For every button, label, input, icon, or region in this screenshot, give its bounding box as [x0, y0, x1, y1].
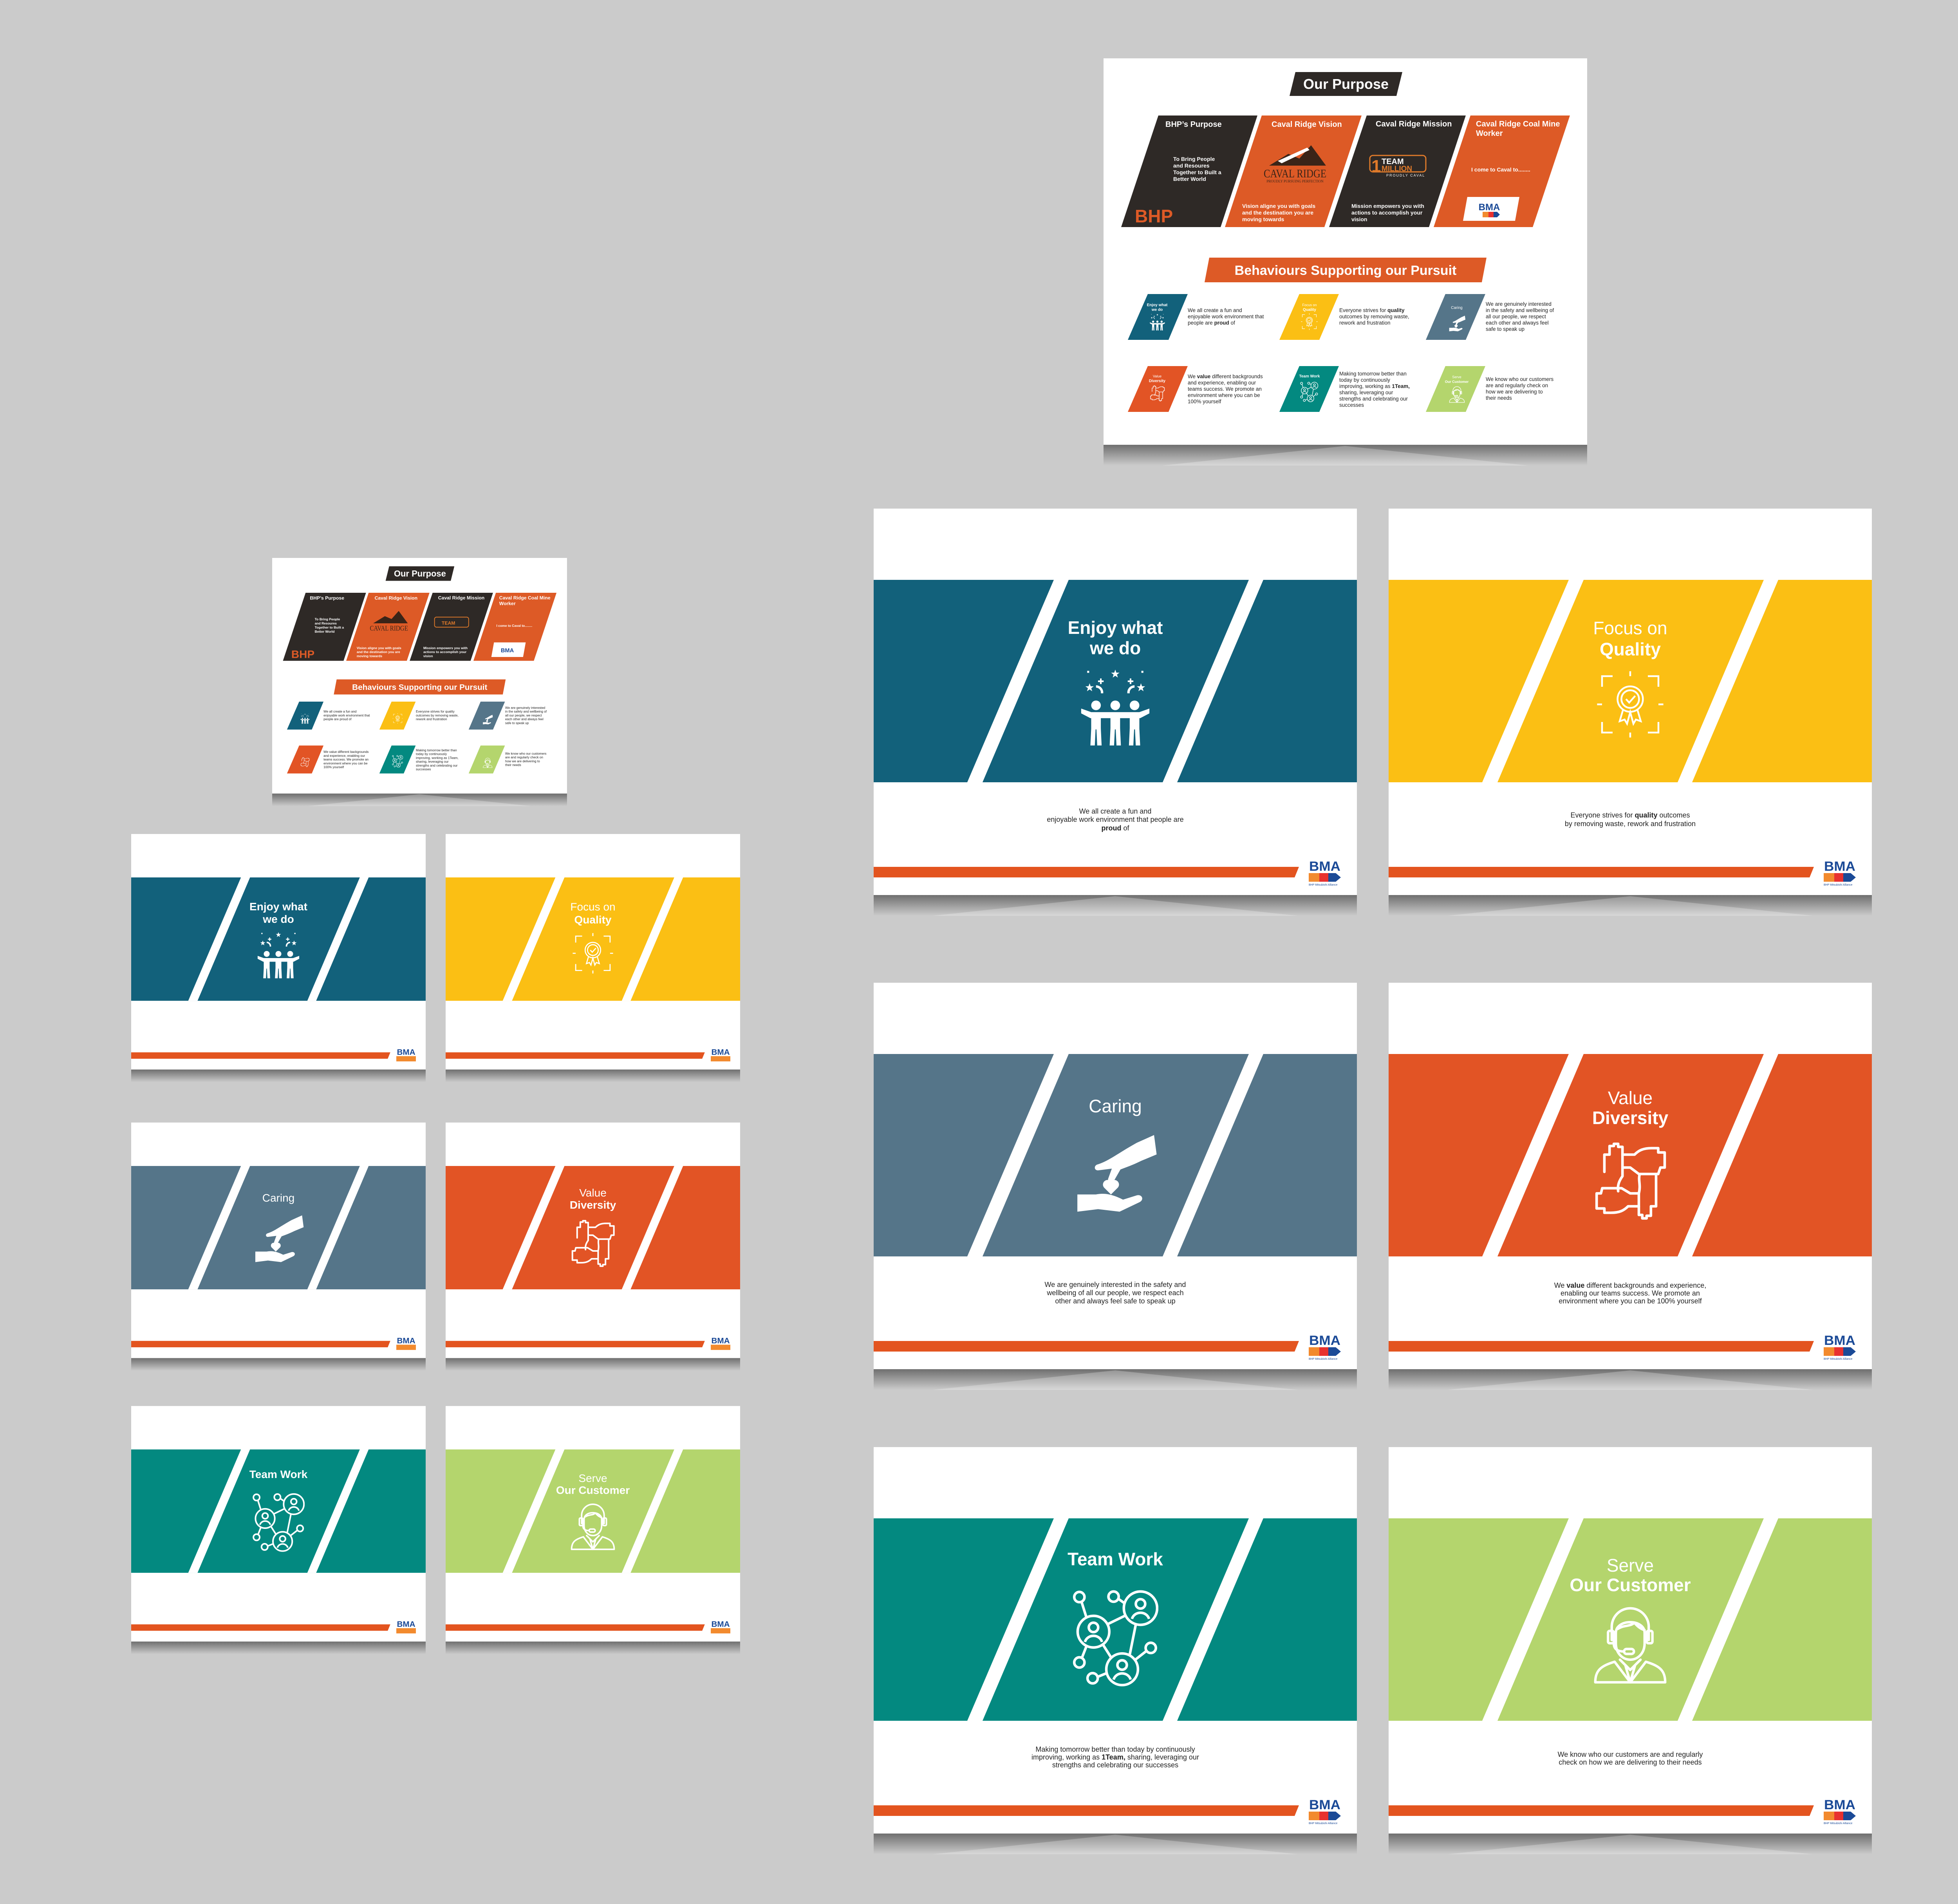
tile: Team Work: Making tomorrow better than	[1339, 371, 1407, 377]
tile: Team Work: strengths and celebrating our	[1339, 396, 1408, 402]
panel: Caval Ridge Coal Mine Worker: I come to Caval to........	[1471, 166, 1530, 173]
footer bar and BMA logo: BHP Mitsubishi Alliance	[1824, 884, 1853, 886]
panel: Caval Ridge Mission: actions to accomplish your	[1351, 209, 1423, 216]
footer bar and logo	[446, 1048, 730, 1061]
text block: enabling our teams success. We promote an	[1561, 1289, 1700, 1297]
footer bar and BMA logo: BMA	[1824, 1798, 1855, 1812]
title: Caring	[262, 1192, 294, 1204]
footer bar and BMA logo: BHP Mitsubishi Alliance	[1309, 1822, 1338, 1825]
footer bar and logo	[131, 1048, 416, 1061]
footer bar and logo: BMA	[397, 1620, 415, 1629]
icon: quality badge	[1597, 671, 1664, 738]
heading: Behaviours Supporting our Pursuit: Behaviours Supporting our Pursuit	[1235, 263, 1456, 278]
footer bar and logo	[131, 1336, 416, 1350]
tiles: behaviours (small): today by continuously	[416, 753, 447, 756]
text block: environment where you can be 100% yourself	[1559, 1297, 1702, 1305]
text block: We value different backgrounds and experience,	[1554, 1281, 1706, 1289]
tiles: behaviours (small)	[287, 702, 547, 773]
panel: Caval Ridge Mission: TEAM	[1382, 157, 1404, 166]
tiles: behaviours (small): their needs	[505, 763, 521, 767]
tiles: behaviours (small): and experience, enabling our	[323, 754, 365, 758]
title: Value	[1608, 1088, 1653, 1108]
panel: Caval Ridge Mission: Mission empowers you with	[1351, 203, 1424, 209]
footer bar and logo	[446, 1620, 730, 1633]
panel: purpose columns (small): and the destination you are	[357, 650, 400, 654]
card: Focus on Quality (large)	[1389, 509, 1872, 916]
tiles: behaviours (small): are and regularly check on	[505, 756, 543, 759]
panel: Caval Ridge Coal Mine Worker	[1434, 116, 1570, 227]
panel: purpose columns (small): actions to accomplish your	[423, 650, 467, 654]
panel: purpose columns (small): Caval Ridge Vision	[375, 596, 417, 601]
title: Value	[579, 1187, 607, 1199]
tile: Enjoy what we do: enjoyable work environment that	[1188, 314, 1264, 319]
tile: Value Diversity: environment where you can be	[1188, 392, 1260, 398]
title: Serve	[578, 1472, 607, 1484]
panel: purpose columns (small): BHP	[291, 648, 314, 660]
tile: Enjoy what we do: Enjoy what	[1147, 303, 1168, 307]
card: Caring (small)	[131, 1123, 426, 1371]
tile: Serve Our Customer: how we are delivering to	[1486, 389, 1543, 395]
footer bar and BMA logo: BMA	[1309, 1333, 1340, 1348]
card: Serve Our Customer (large)	[1389, 1447, 1872, 1854]
icon: team network	[1074, 1592, 1157, 1685]
tile: Serve Our Customer: Serve	[1452, 375, 1461, 379]
tile: Caring: We are genuinely interested	[1486, 301, 1552, 307]
panel: BHP's Purpose: and Resoures	[1173, 162, 1210, 169]
footer bar and logo: BMA	[711, 1336, 730, 1345]
icon: people celebrating	[1081, 670, 1149, 745]
tile: Caring: each other and always feel	[1486, 320, 1549, 326]
footer bar and logo	[446, 1336, 730, 1350]
tile: Serve Our Customer: are and regularly check on	[1486, 383, 1548, 388]
panel: purpose columns (small): Vision aligne you with goals	[357, 646, 401, 650]
tile: Team Work: successes	[1339, 402, 1364, 408]
panel: BHP's Purpose	[1121, 116, 1257, 227]
tile: Enjoy what we do: people are proud of	[1188, 320, 1235, 326]
panel: Caval Ridge Coal Mine Worker: Caval Ridge Coal Mine	[1476, 120, 1560, 128]
panel: Caval Ridge Mission: PROUDLY CAVAL	[1386, 173, 1425, 177]
tiles: behaviours (small): safe to speak up	[505, 721, 529, 725]
title: Diversity	[1592, 1108, 1669, 1128]
tile: Enjoy what we do: we do	[1151, 308, 1163, 312]
tile: Team Work: sharing, leveraging our	[1339, 390, 1393, 395]
tiles: behaviours (small): We are genuinely interested	[505, 706, 545, 709]
card: Value Diversity (small)	[446, 1123, 740, 1371]
tile: Value Diversity: Value	[1153, 374, 1161, 378]
icon: caring hands	[1077, 1135, 1157, 1212]
tiles: behaviours (small): successes	[416, 768, 431, 771]
footer bar and BMA logo	[874, 859, 1341, 886]
text block: other and always feel safe to speak up	[1055, 1297, 1176, 1305]
panel: Caval Ridge Vision: moving towards	[1242, 216, 1284, 222]
title: Quality	[574, 914, 612, 926]
icon	[573, 933, 613, 973]
panel: purpose columns (small): Better World	[315, 630, 335, 633]
panel: purpose columns (small): Worker	[499, 601, 516, 606]
tiles: behaviours (small): We know who our customers	[505, 752, 546, 755]
footer bar and logo	[131, 1620, 416, 1633]
footer bar and BMA logo: BHP Mitsubishi Alliance	[1309, 1358, 1338, 1361]
tile: Team Work: improving, working as 1Team,	[1339, 383, 1410, 389]
panel: BHP's Purpose: Together to Built a	[1173, 169, 1221, 175]
panel: purpose columns (small): TEAM	[442, 621, 455, 626]
tiles: behaviours (small): people are proud of	[323, 718, 352, 721]
tile: Value Diversity: and experience, enabling our	[1188, 380, 1256, 386]
title: Diversity	[570, 1199, 616, 1211]
tile: Focus on Quality: rework and frustration	[1339, 320, 1391, 326]
card: Team Work (large)	[874, 1447, 1357, 1854]
text block: wellbeing of all our people, we respect each	[1046, 1289, 1184, 1297]
tile: Value Diversity: teams success. We promote an	[1188, 386, 1262, 392]
panel: Caval Ridge Vision	[1225, 116, 1362, 227]
panel: Caval Ridge Coal Mine Worker: Worker	[1476, 129, 1503, 138]
tile: Team Work	[1279, 366, 1410, 412]
tiles: behaviours (small): We value different backgrounds	[323, 750, 368, 754]
tiles: behaviours (small): strengths and celebrating our	[416, 764, 458, 767]
footer bar and BMA logo	[1389, 1333, 1856, 1361]
footer bar and logo: BMA	[711, 1620, 730, 1629]
text block: Everyone strives for quality outcomes	[1570, 811, 1690, 819]
text block: Making tomorrow better than today by continuously	[1035, 1745, 1195, 1753]
footer bar and BMA logo	[874, 1798, 1341, 1825]
title: Enjoy what	[249, 901, 307, 913]
panel: Caval Ridge Vision: CAVAL RIDGE	[1264, 167, 1326, 180]
tiles: behaviours (small): rework and frustration	[416, 718, 447, 721]
footer bar and BMA logo: BHP Mitsubishi Alliance	[1309, 884, 1338, 886]
panel: Caval Ridge Vision: PROUDLY PURSUING PERFECTION	[1266, 179, 1324, 183]
tile: Caring: Caring	[1451, 306, 1463, 310]
text block: strengths and celebrating our successes	[1052, 1761, 1178, 1769]
panel: purpose columns (small): BHP’s Purpose	[310, 596, 344, 601]
tile: Focus on Quality: Focus on	[1302, 303, 1317, 307]
title: Enjoy what	[1068, 617, 1163, 638]
tiles: behaviours (small): each other and always feel	[505, 718, 544, 721]
title: Quality	[1600, 639, 1661, 659]
tile: Serve Our Customer	[1426, 366, 1553, 412]
tiles: behaviours (small): enjoyable work environment that	[323, 714, 370, 717]
panel: Our Purpose board (large)	[1104, 58, 1587, 466]
tiles: behaviours (small): how we are delivering to	[505, 760, 540, 763]
panel: Caval Ridge Mission: 1	[1371, 157, 1381, 176]
footer bar and BMA logo: BMA	[1309, 1798, 1340, 1812]
card: Focus on Quality (small)	[446, 834, 740, 1082]
icon	[573, 1221, 614, 1266]
tile: Value Diversity: Diversity	[1149, 379, 1166, 383]
panel: Our Purpose board (small)	[272, 558, 567, 806]
tile: Focus on Quality: Everyone strives for quality	[1339, 307, 1405, 313]
card: Enjoy what we do (large)	[874, 509, 1357, 916]
card: Value Diversity (large)	[1389, 983, 1872, 1390]
panel: BHP's Purpose: BHP’s Purpose	[1165, 120, 1222, 129]
icon	[572, 1504, 614, 1549]
panel: BHP's Purpose: Better World	[1173, 176, 1206, 182]
panel: Caval Ridge Vision: Vision aligne you with goals	[1242, 203, 1315, 209]
title: Caring	[1089, 1096, 1142, 1116]
tile: Value Diversity: We value different backgrounds	[1188, 374, 1263, 379]
panel: purpose columns (small): moving towards	[357, 654, 382, 658]
heading: Our Purpose: Our Purpose	[1303, 76, 1389, 92]
icon	[258, 932, 299, 978]
tiles: behaviours (small): all our people, we respect	[505, 714, 542, 717]
footer bar and BMA logo: BMA	[1824, 1333, 1855, 1348]
text block: by removing waste, rework and frustration	[1565, 820, 1696, 828]
tile: Serve Our Customer: Our Customer	[1445, 380, 1469, 384]
footer bar and BMA logo: BMA	[1824, 859, 1855, 874]
footer bar and logo: BMA	[711, 1048, 730, 1057]
footer bar and logo: BMA	[397, 1048, 415, 1057]
heading: Behaviours (small): Behaviours Supporting our Pursuit	[352, 683, 488, 692]
panel: Caval Ridge Coal Mine Worker: BMA	[1479, 202, 1500, 213]
panel: BHP's Purpose: To Bring People	[1173, 156, 1215, 162]
panel: purpose columns (small): Together to Built a	[315, 625, 344, 629]
tile: Caring: all our people, we respect	[1486, 314, 1546, 319]
tile: Value Diversity	[1128, 366, 1263, 412]
card: Team Work (small)	[131, 1406, 426, 1654]
title: we do	[1089, 638, 1141, 658]
panel: purpose columns (small): To Bring People	[315, 617, 340, 621]
panel: Caval Ridge Mission: Caval Ridge Mission	[1376, 120, 1452, 128]
title: Serve	[1607, 1555, 1654, 1576]
tile: Enjoy what we do: We all create a fun and	[1188, 307, 1242, 313]
tiles: behaviours (small): in the safety and wellbeing of	[505, 710, 547, 713]
heading: Our Purpose (small): Our Purpose	[394, 569, 446, 579]
text block: check on how we are delivering to their needs	[1559, 1758, 1702, 1766]
card: Caring (large)	[874, 983, 1357, 1390]
text block: We know who our customers are and regularly	[1558, 1751, 1703, 1758]
panel: purpose columns (small): Caval Ridge Mission	[438, 595, 484, 601]
footer bar and logo: BMA	[397, 1336, 415, 1345]
footer bar and BMA logo: BHP Mitsubishi Alliance	[1824, 1358, 1853, 1361]
panel: purpose columns (small): BMA	[501, 648, 514, 654]
panel: BHP's Purpose: BHP	[1135, 206, 1173, 226]
text block: We are genuinely interested in the safety and	[1045, 1281, 1186, 1289]
icon	[253, 1494, 304, 1551]
title: Our Customer	[556, 1484, 630, 1496]
heading: Our Purpose (small)	[386, 566, 454, 581]
footer bar and BMA logo: BMA	[1309, 859, 1340, 874]
title: Team Work	[1068, 1549, 1163, 1569]
panel: Caval Ridge Mission: vision	[1351, 216, 1367, 222]
panel: purpose columns (small): and Resoures	[315, 621, 337, 625]
tiles: behaviours (small): 100% yourself	[323, 765, 344, 769]
tile: Caring: safe to speak up	[1486, 326, 1524, 332]
footer bar and BMA logo	[1389, 859, 1856, 886]
heading: Behaviours Supporting our Pursuit	[1205, 258, 1487, 282]
tile: Value Diversity: 100% yourself	[1188, 399, 1221, 404]
heading: Our Purpose	[1290, 72, 1402, 96]
tiles: behaviours (small): Making tomorrow better than	[416, 749, 457, 752]
text block: enjoyable work environment that people are	[1047, 816, 1184, 823]
icon: customer service agent	[1595, 1608, 1665, 1682]
panel: purpose columns (small): Mission empowers you with	[423, 646, 468, 650]
text block: proud of	[1101, 824, 1129, 832]
title: we do	[262, 913, 294, 925]
tile: Serve Our Customer: We know who our customers	[1486, 376, 1553, 382]
tile: Focus on Quality: outcomes by removing waste,	[1339, 314, 1409, 319]
panel: purpose columns (small): CAVAL RIDGE	[370, 624, 408, 632]
tile: Serve Our Customer: their needs	[1486, 395, 1512, 401]
tiles: behaviours (small): improving, working as 1Team,	[416, 756, 459, 760]
footer bar and BMA logo: BHP Mitsubishi Alliance	[1824, 1822, 1853, 1825]
footer bar and BMA logo	[1389, 1798, 1856, 1825]
tiles: behaviours (small): teams success. We promote an	[323, 758, 369, 762]
panel: Caval Ridge Vision: and the destination you are	[1242, 209, 1313, 216]
card: Enjoy what we do (small)	[131, 834, 426, 1082]
tile: Team Work: today by continuously	[1339, 377, 1390, 383]
tiles: behaviours (small): We all create a fun and	[323, 710, 357, 713]
text block: improving, working as 1Team, sharing, leveraging our	[1031, 1753, 1199, 1761]
heading: Behaviours (small)	[334, 679, 506, 695]
tile: Enjoy what we do	[1128, 294, 1264, 340]
icon: four hands	[1597, 1144, 1665, 1218]
panel: purpose columns (small): vision	[423, 654, 433, 658]
panel: purpose columns (small): Caval Ridge Coal Mine	[499, 595, 551, 601]
title: Team Work	[249, 1468, 308, 1480]
icon	[255, 1215, 303, 1262]
title: Our Customer	[1570, 1575, 1691, 1595]
tiles: behaviours (small): environment where you can be	[323, 762, 368, 765]
panel: purpose columns (small): I come to Caval to........	[496, 624, 532, 628]
panel: Caval Ridge Mission	[1329, 116, 1466, 227]
panel: Caval Ridge Vision: Caval Ridge Vision	[1272, 120, 1342, 129]
text block: We all create a fun and	[1079, 807, 1151, 815]
tiles: behaviours (small): outcomes by removing waste,	[416, 714, 459, 717]
card: Serve Our Customer (small)	[446, 1406, 740, 1654]
panel: Caval Ridge Mission: MILLION	[1382, 165, 1412, 173]
tile: Team Work: Team Work	[1299, 374, 1320, 379]
footer bar and BMA logo	[874, 1333, 1341, 1361]
panel: purpose columns (small)	[283, 593, 556, 661]
tiles: behaviours (small): sharing, leveraging our	[416, 760, 449, 763]
tiles: behaviours (small): Everyone strives for quality	[416, 710, 455, 713]
tile: Caring: in the safety and wellbeing of	[1486, 307, 1554, 313]
title: Focus on	[570, 901, 616, 913]
tile: Focus on Quality	[1279, 294, 1409, 340]
tile: Caring	[1426, 294, 1554, 340]
title: Focus on	[1593, 618, 1667, 638]
tile: Focus on Quality: Quality	[1303, 308, 1316, 312]
